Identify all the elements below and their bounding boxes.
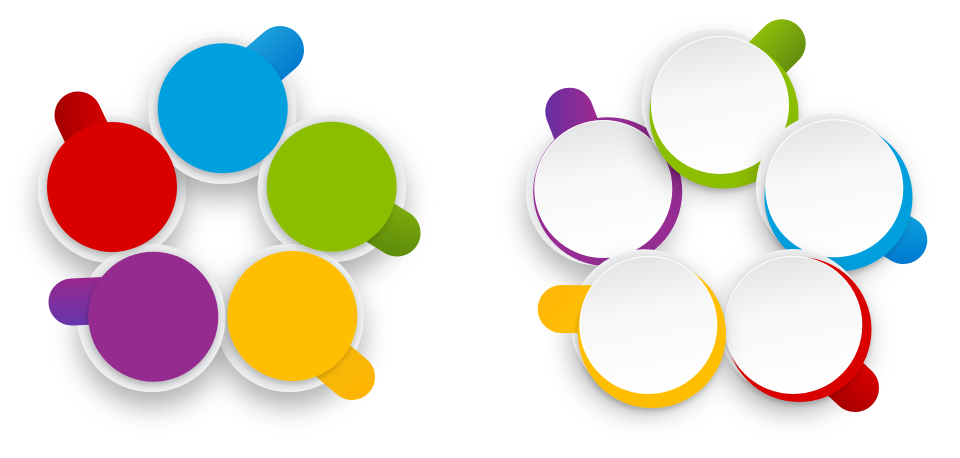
disc: red crescent [719, 249, 872, 402]
disc: purple [72, 252, 218, 382]
disc: blue crescent [756, 113, 912, 271]
disc: blue [158, 43, 288, 173]
disc: green crescent [642, 28, 798, 188]
left diagram: solid coloured discs [38, 36, 406, 392]
right diagram: white discs with coloured crescents [526, 28, 912, 408]
disc: red [47, 115, 177, 252]
disc: green [267, 122, 397, 252]
disc: yellow [227, 251, 357, 381]
disc: purple crescent [526, 112, 682, 266]
grey backing plates [38, 36, 406, 392]
disc: yellow crescent [562, 249, 726, 408]
